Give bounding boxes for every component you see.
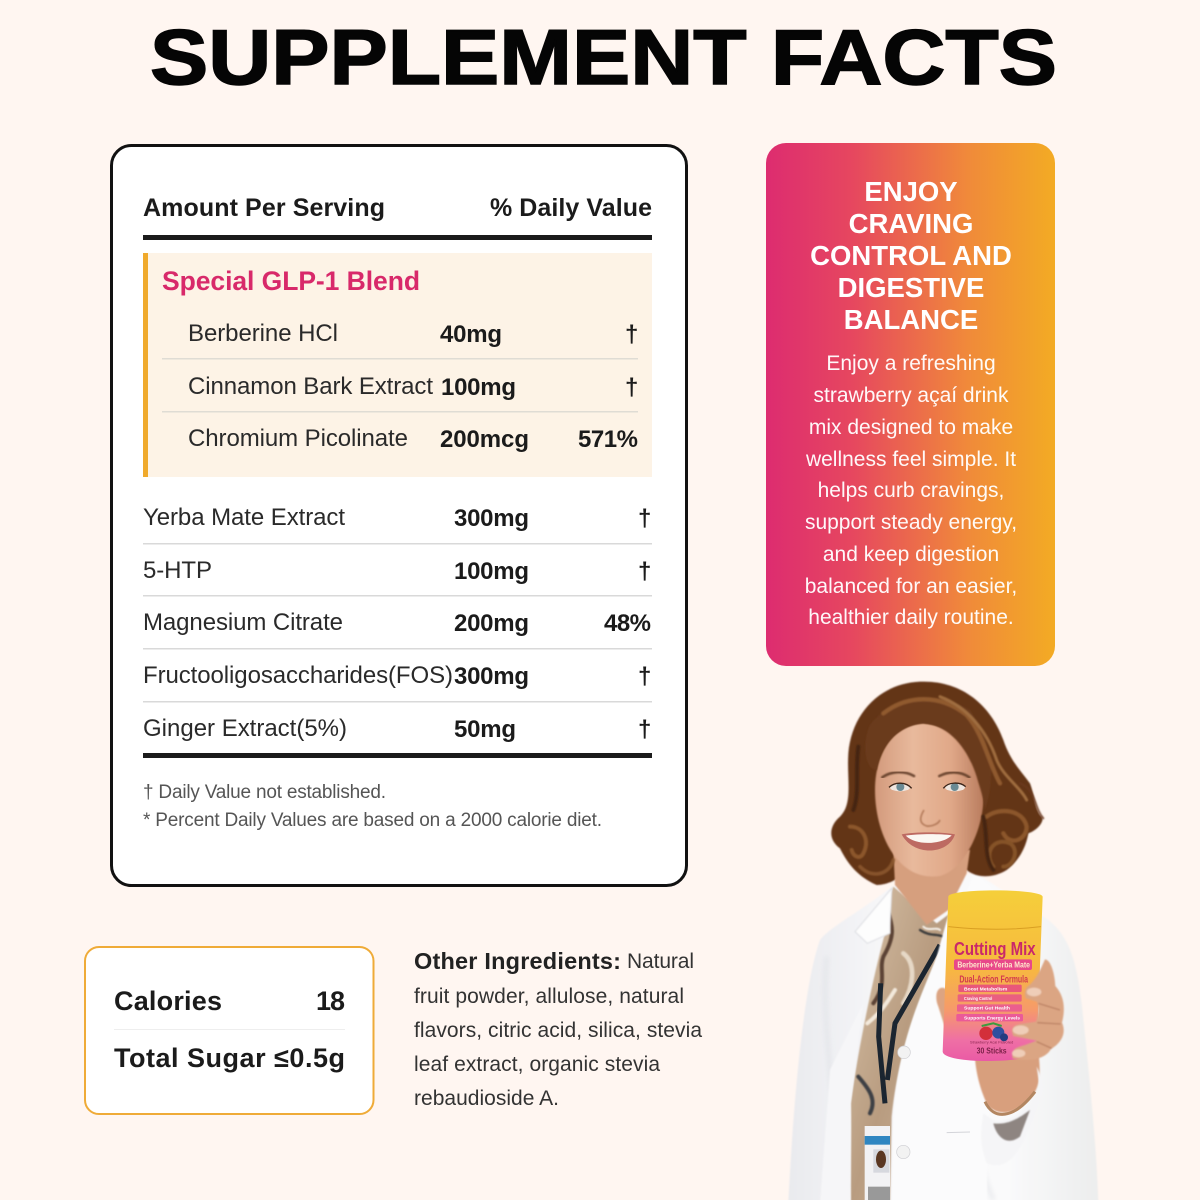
text block: other ingredients: flavors, citric acid, silica, stevia [414, 1019, 702, 1042]
eyes [889, 783, 966, 791]
callout heading: ENJOY [864, 176, 958, 207]
blend row: cinnamon: Cinnamon Bark Extract [188, 373, 433, 400]
row: magnesium [143, 609, 651, 637]
canister: Boost Metabolism [964, 986, 1008, 992]
callout heading: DIGESTIVE [838, 272, 984, 303]
row: 5-HTP [143, 557, 651, 585]
text block: other ingredients: leaf extract, organic stevia [414, 1053, 660, 1076]
bracelet [985, 1092, 1035, 1114]
callout body: balanced for an easier, [805, 575, 1017, 598]
inner cuff [993, 1110, 1030, 1141]
berries [979, 1023, 1008, 1041]
table header: % Daily Value [490, 194, 652, 222]
blend row: berberine: † [625, 321, 638, 348]
callout body [805, 352, 1017, 629]
callout body: healthier daily routine. [808, 606, 1014, 629]
canister: Dual-Action Formula [959, 975, 1028, 986]
blouse print [858, 910, 943, 1113]
blend row: berberine: Berberine HCl [188, 320, 338, 347]
text block: other ingredients: Other Ingredients: [414, 948, 621, 974]
panel: calories and sugar: 18 [316, 986, 345, 1016]
callout body: wellness feel simple. It [805, 448, 1016, 471]
row: yerba mate: † [638, 505, 651, 532]
panel: supplement facts table [112, 146, 686, 886]
sleeve cuff [981, 1067, 1043, 1165]
panel: calories and sugar [85, 947, 374, 1114]
blend heading: Special GLP-1 Blend [162, 266, 420, 296]
image: doctor holding product canister [788, 682, 1098, 1200]
coat shading [825, 957, 993, 1200]
blend row: chromium [188, 425, 638, 453]
canister: Strawberry Acai Flavored [970, 1040, 1013, 1044]
blend row: cinnamon: † [625, 374, 638, 401]
row: yerba mate: Yerba Mate Extract [143, 504, 345, 531]
text block: other ingredients: rebaudioside A. [414, 1087, 559, 1110]
row: 5-HTP: † [638, 558, 651, 585]
callout body: support steady energy, [805, 511, 1017, 534]
text block: other ingredients: fruit powder, allulose, natural [414, 985, 684, 1008]
face [875, 723, 984, 877]
footnotes [143, 782, 602, 831]
blouse [851, 887, 950, 1200]
canister: 30 Sticks [977, 1046, 1007, 1055]
hair fringe and curls [850, 697, 1043, 874]
coat buttons [897, 1046, 970, 1159]
panel: special GLP-1 blend [143, 253, 652, 477]
row: ginger [143, 715, 651, 743]
row: magnesium: 200mg [454, 610, 529, 637]
blend row: berberine: 40mg [440, 321, 502, 348]
mouth [902, 832, 955, 850]
brows [882, 772, 969, 777]
callout body: strawberry açaí drink [814, 384, 1009, 407]
row: ginger: Ginger Extract(5%) [143, 715, 347, 742]
callout heading: CRAVING [849, 208, 973, 239]
text block: other ingredients: Natural [627, 950, 694, 973]
table header [143, 194, 652, 240]
row: magnesium: 48% [604, 610, 651, 637]
nose [921, 810, 940, 826]
panel: calories and sugar: Calories [114, 986, 222, 1016]
panel: calories and sugar: Total Sugar ≤0.5g [114, 1043, 345, 1073]
row: FOS: 300mg [454, 663, 529, 690]
row: FOS [143, 662, 651, 690]
hair back [831, 682, 1043, 885]
canister: Support Gut Health [964, 1006, 1010, 1012]
callout heading [810, 176, 1012, 335]
callout body: mix designed to make [809, 416, 1013, 439]
neck and chest [893, 850, 970, 925]
title: SUPPLEMENT FACTS [150, 13, 1057, 101]
row: ginger: † [638, 716, 651, 743]
blend row: chromium: 200mcg [440, 426, 529, 453]
footnotes: * Percent Daily Values are based on a 2000 calorie diet. [143, 810, 602, 831]
footnotes: † Daily Value not established. [143, 782, 386, 803]
text block: other ingredients [414, 948, 702, 1110]
inner coat lapels [820, 872, 993, 1200]
row: yerba mate: 300mg [454, 505, 529, 532]
canister: Craving Control [964, 996, 993, 1002]
ID badge [865, 1126, 890, 1200]
coat [788, 873, 1098, 1200]
callout heading: BALANCE [844, 304, 978, 335]
canister: Berberine+Yerba Mate [957, 960, 1030, 970]
panel: craving control callout [766, 143, 1055, 666]
thumb behind canister [936, 988, 957, 1043]
blend row: chromium: Chromium Picolinate [188, 425, 408, 452]
table header: Amount Per Serving [143, 194, 385, 222]
callout heading: CONTROL AND [810, 240, 1012, 271]
fingernails [1012, 988, 1041, 1057]
canister [943, 890, 1043, 1061]
row: yerba mate [143, 504, 651, 532]
blend row: cinnamon: 100mg [441, 374, 516, 401]
blend row: berberine [188, 320, 638, 348]
palm and wrist [975, 1040, 1040, 1112]
blend row: cinnamon [188, 373, 638, 401]
fingers [1012, 959, 1064, 1060]
row: magnesium: Magnesium Citrate [143, 609, 343, 636]
row: 5-HTP: 5-HTP [143, 557, 212, 584]
canister: Supports Energy Levels [964, 1016, 1020, 1022]
row: ginger: 50mg [454, 716, 516, 743]
row: FOS: † [638, 663, 651, 690]
blend row: chromium: 571% [578, 426, 638, 453]
callout body: helps curb cravings, [818, 479, 1004, 502]
row: 5-HTP: 100mg [454, 558, 529, 585]
canister: Cutting Mix [954, 938, 1036, 959]
callout body: and keep digestion [823, 543, 999, 566]
callout body: Enjoy a refreshing [826, 352, 996, 375]
row: FOS: Fructooligosaccharides(FOS) [143, 662, 453, 689]
lanyard [879, 945, 940, 1103]
